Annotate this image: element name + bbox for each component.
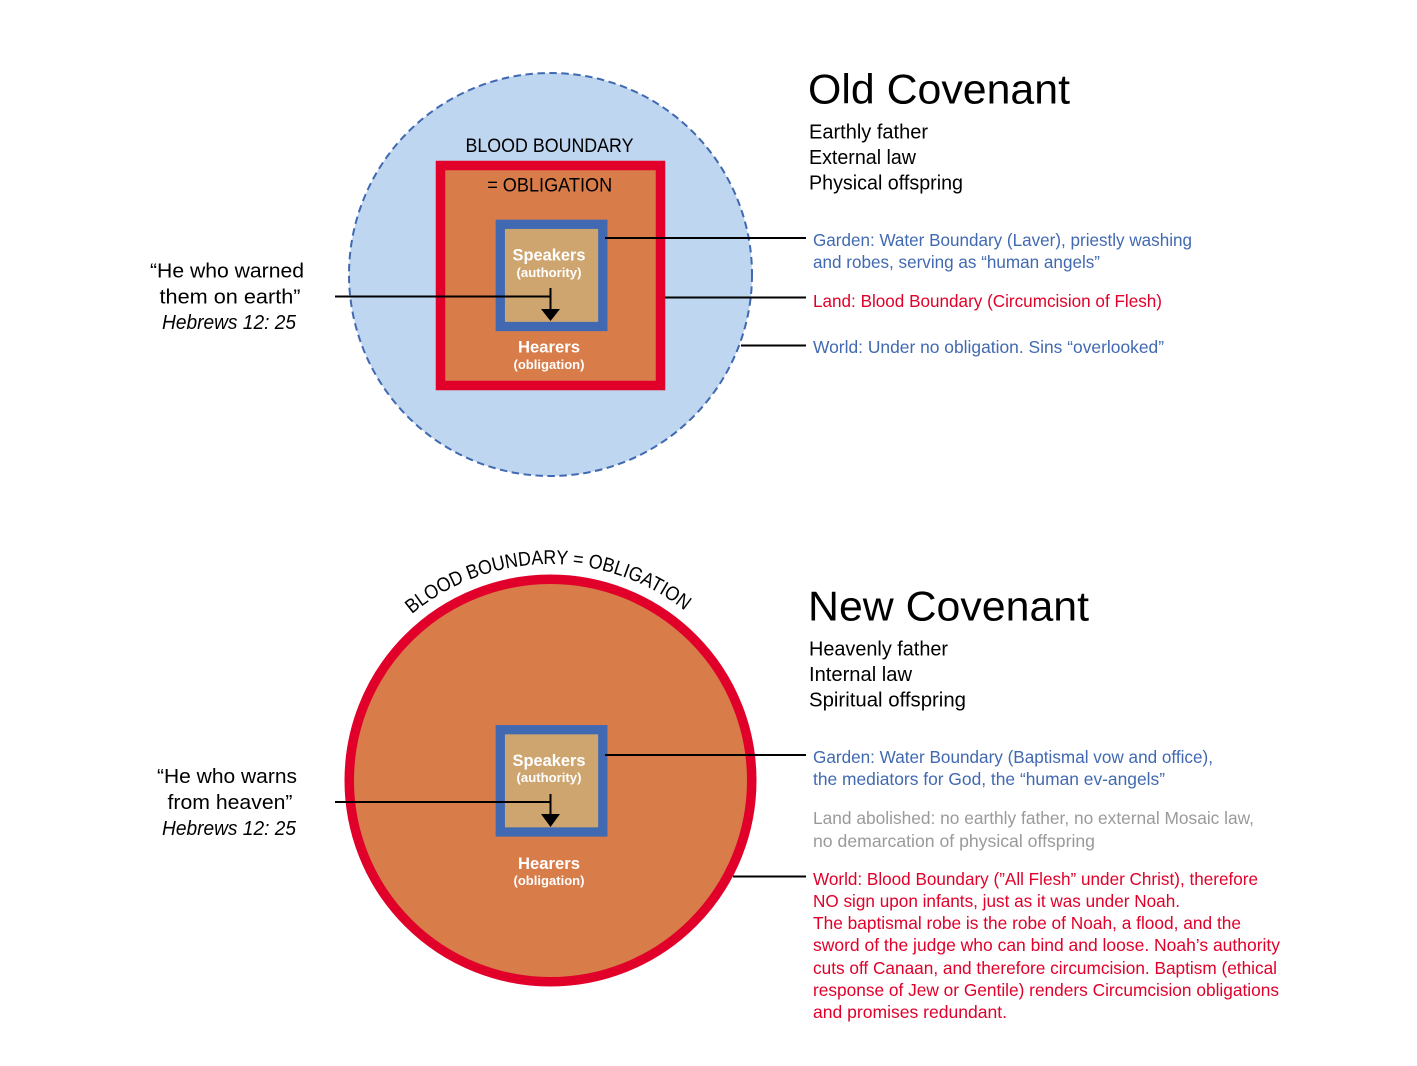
text: land abolished: [813, 808, 1254, 851]
label: hearers: Hearers: [518, 854, 580, 873]
arrow: speakers to hearers: [335, 794, 560, 827]
heading: old covenant: Old Covenant: [808, 66, 1070, 112]
label: obligation small: (obligation): [514, 874, 584, 888]
quote: he who warns: Hebrews 12: 25: [162, 817, 297, 840]
list: new covenant traits: Internal law: [809, 664, 913, 686]
curved label: BLOOD BOUNDARY = OBLIGATION: [404, 550, 692, 614]
quote: he who warned: them on earth”: [160, 286, 301, 308]
list: old covenant traits: [809, 122, 963, 194]
heading: blood boundary: BLOOD BOUNDARY: [466, 135, 634, 157]
text: new world: World: Blood Boundary (”All Flesh” under Christ), therefore: [813, 869, 1258, 889]
world circle: [349, 579, 752, 982]
land square: [440, 166, 660, 386]
text: new garden: the mediators for God, the “human ev-angels”: [813, 769, 1165, 789]
connector lines: new covenant: [605, 755, 806, 876]
label: authority: (authority): [516, 771, 582, 785]
text: new garden: Garden: Water Boundary (Baptismal vow and office),: [813, 747, 1213, 767]
label: hearers: Hearers: [518, 338, 580, 356]
text: land abolished: no demarcation of physical offspring: [813, 831, 1095, 851]
text: new world: and promises redundant.: [813, 1002, 1007, 1022]
label: speakers: Speakers: [512, 751, 586, 770]
quote: he who warns: from heaven”: [168, 791, 293, 814]
label: obligation: = OBLIGATION: [487, 174, 612, 196]
text: new world: cuts off Canaan, and therefore circumcision. Baptism (ethical: [813, 958, 1277, 978]
text: new world: [813, 869, 1280, 1022]
text: new world: The baptismal robe is the robe of Noah, a flood, and the: [813, 913, 1241, 933]
quote: he who warned: Hebrews 12: 25: [162, 311, 297, 334]
list: new covenant traits: [809, 638, 966, 712]
label: obligation small: (obligation): [514, 358, 584, 372]
list: old covenant traits: Physical offspring: [809, 172, 963, 194]
label: speakers: Speakers: [512, 246, 586, 265]
text: new garden: [813, 747, 1213, 789]
text: new world: NO sign upon infants, just as it was under Noah.: [813, 891, 1180, 911]
diagram: old covenant: [335, 73, 752, 476]
text: land abolished: Land abolished: no earthly father, no external Mosaic law,: [813, 808, 1254, 828]
list: old covenant traits: Earthly father: [809, 122, 928, 144]
label: authority: (authority): [516, 266, 582, 280]
diagram: new covenant: [335, 550, 756, 986]
text: new world: sword of the judge who can bind and loose. Noah’s authority: [813, 935, 1280, 955]
text: old garden: [813, 230, 1192, 272]
garden square: [500, 730, 603, 832]
text: new world: response of Jew or Gentile) renders Circumcision obligations: [813, 980, 1279, 1000]
text: old world: World: Under no obligation. Sins “overlooked”: [813, 337, 1164, 357]
garden square: [500, 224, 603, 326]
heading: new covenant: New Covenant: [808, 582, 1089, 630]
world circle: [349, 73, 752, 476]
arrow: speakers to hearers: [335, 288, 560, 321]
list: old covenant traits: External law: [809, 147, 917, 169]
quote: he who warned: [150, 260, 304, 334]
text: old garden: Garden: Water Boundary (Laver), priestly washing: [813, 230, 1192, 250]
list: new covenant traits: Spiritual offspring: [809, 690, 966, 712]
text: old land: Land: Blood Boundary (Circumcision of Flesh): [813, 291, 1162, 311]
quote: he who warns: [157, 765, 297, 840]
text: old garden: and robes, serving as “human angels”: [813, 252, 1100, 272]
quote: he who warned: “He who warned: [150, 260, 304, 282]
list: new covenant traits: Heavenly father: [809, 638, 948, 660]
quote: he who warns: “He who warns: [157, 765, 297, 788]
connector lines: old covenant: [605, 238, 806, 346]
